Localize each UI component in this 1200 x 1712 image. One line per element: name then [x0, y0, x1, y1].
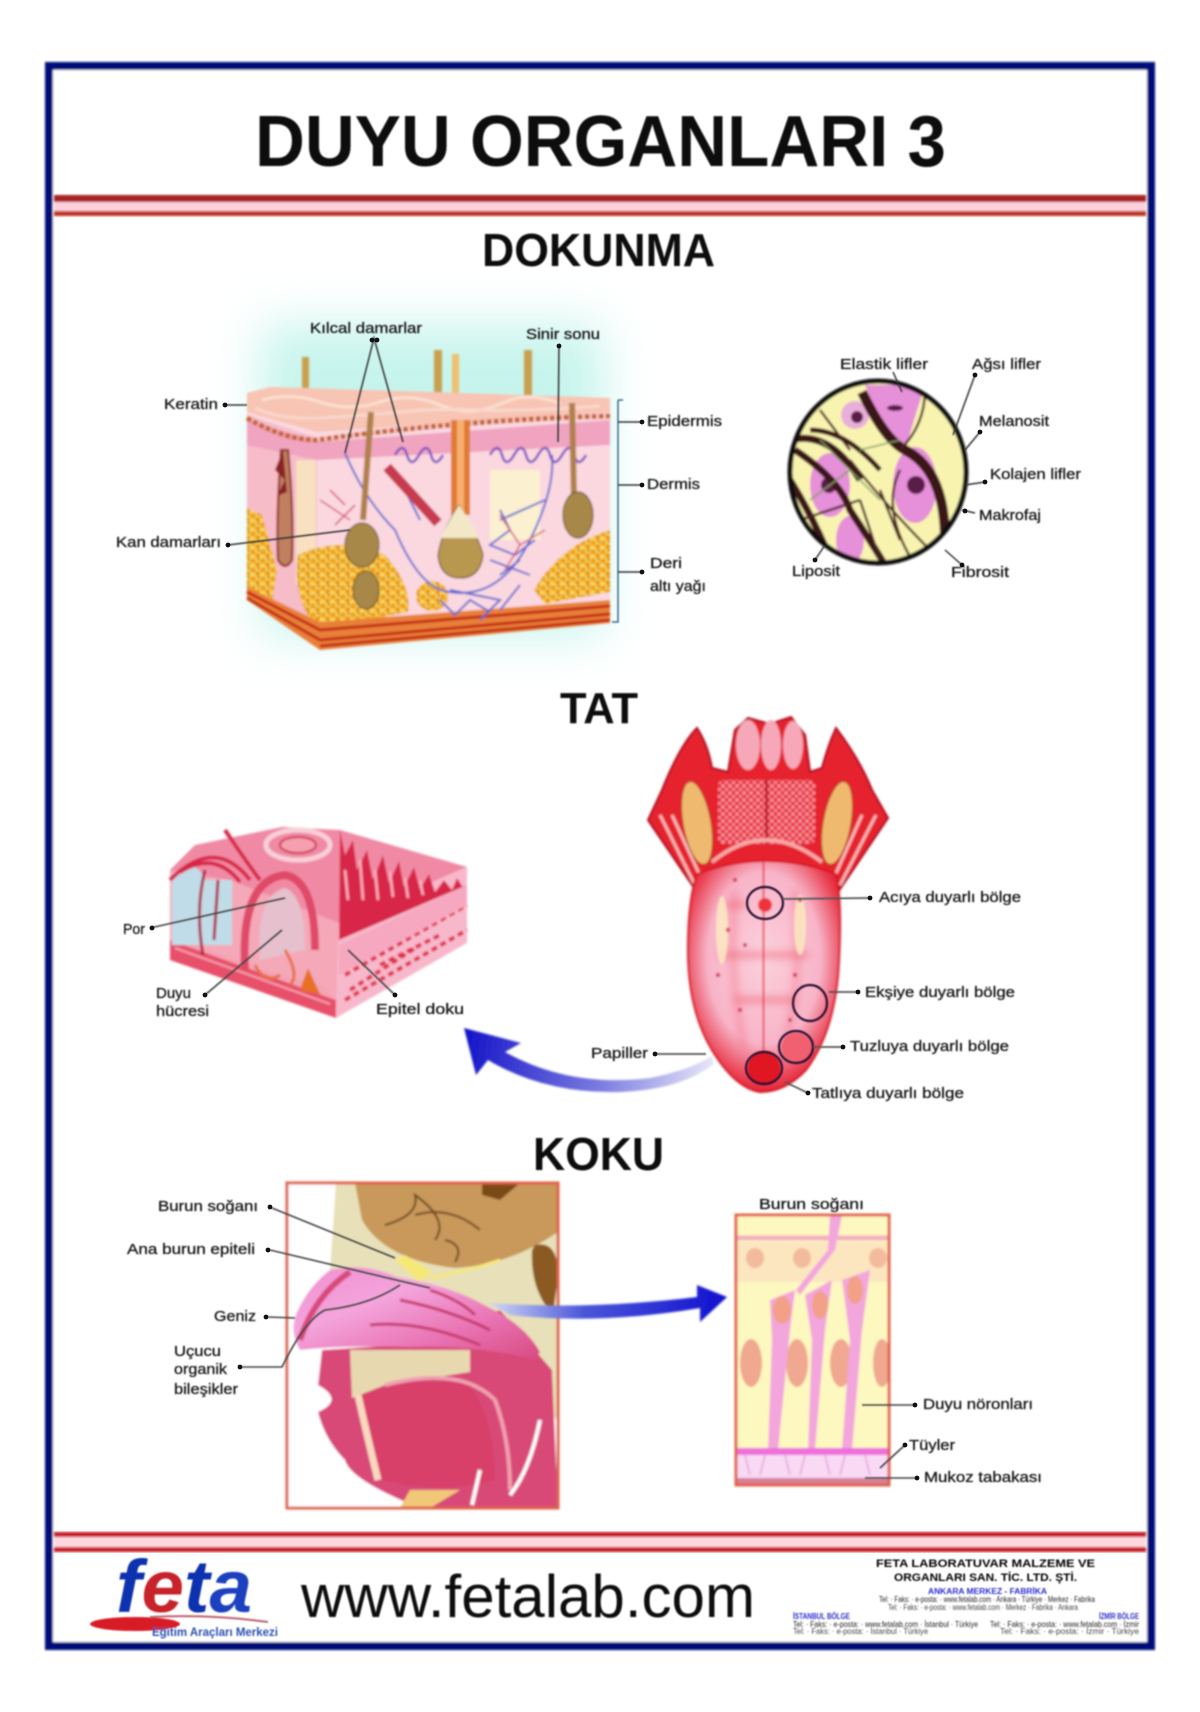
label: Kolajen lifler — [990, 466, 1081, 483]
label: Geniz — [214, 1308, 256, 1325]
right follicle — [563, 403, 593, 538]
epidermis band — [247, 420, 610, 460]
label: Keratin — [164, 396, 218, 413]
logo: feta: feta — [116, 1545, 252, 1628]
logo: feta: Eğitim Araçları Merkezi — [152, 1625, 278, 1639]
taste bud arch — [244, 875, 315, 970]
panel: skin cross-section — [223, 325, 644, 650]
skin top surface — [247, 387, 610, 432]
block leader lines — [150, 898, 395, 995]
label: Sinir sonu — [526, 326, 600, 343]
company contact block: Tel: · Faks: · e-posta: · www.fetalab.com · Ankara · Türkiye · Merkez · Fabrika — [879, 1595, 1095, 1604]
label: Uçucu — [174, 1343, 221, 1360]
blue vessels — [345, 453, 552, 620]
label: Tuzluya duyarlı bölge — [850, 1038, 1009, 1055]
company contact block: Tel: · Faks: · e-posta: · İstanbul · Türkiye — [793, 1627, 929, 1636]
label: Burun soğanı — [759, 1196, 864, 1213]
filiform papillae — [339, 830, 467, 940]
leader dots epithelium — [903, 1403, 919, 1480]
neurons — [768, 1215, 870, 1450]
label: Papiller — [591, 1045, 648, 1062]
label: Deri — [650, 555, 682, 572]
company contact block: FETA LABORATUVAR MALZEME VE — [876, 1558, 1095, 1570]
head labels — [127, 1198, 258, 1398]
label: Ekşiye duyarlı bölge — [865, 984, 1015, 1001]
pink cells — [810, 385, 937, 564]
leader lines skin — [225, 338, 642, 622]
company contact block: Tel: · Faks: · e-posta: · İzmir · Türkiye — [1000, 1627, 1140, 1636]
olfactory bulb — [395, 1255, 432, 1282]
lingual tonsil texture — [718, 780, 815, 844]
top face — [170, 827, 467, 923]
epithelium labels — [759, 1196, 1042, 1486]
heading: koku: KOKU — [533, 1128, 664, 1180]
pale mouth band — [350, 1350, 470, 1398]
panel: tongue — [648, 717, 888, 1095]
skin block base — [247, 387, 610, 650]
arrow: nose to epithelium — [488, 1285, 727, 1322]
salmon nuclei — [740, 1248, 891, 1387]
label: Fibrosit — [951, 564, 1010, 581]
mucus layer — [736, 1448, 889, 1455]
median groove — [763, 860, 764, 1075]
label: Epitel doku — [376, 1001, 464, 1018]
label: Dermis — [647, 476, 700, 493]
company contact block: Tel: · Faks: · e-posta: · www.fetalab.com · İzmir — [990, 1620, 1139, 1629]
heading: dokunma: DOKUNMA — [482, 224, 715, 276]
label: Elastik lifler — [840, 356, 928, 373]
leader dots circle — [813, 373, 987, 567]
header double rule — [54, 195, 1146, 216]
label: Duyu — [156, 985, 191, 1002]
tongue body — [688, 861, 840, 1092]
coiled gland — [345, 412, 379, 609]
label: Liposit — [792, 563, 841, 580]
label: Ana burun epiteli — [127, 1241, 255, 1258]
fat lobes — [247, 508, 610, 630]
tongue leader lines — [655, 898, 870, 1093]
panel: taste bud block — [150, 827, 467, 1018]
panel: microscopic dermis circle — [790, 372, 987, 570]
main hair follicle — [438, 420, 483, 578]
company contact block: ANKARA MERKEZ - FABRİKA — [928, 1587, 1047, 1596]
label: Melanosit — [979, 413, 1050, 430]
label: Acıya duyarlı bölge — [879, 889, 1021, 906]
tongue labels — [591, 889, 1021, 1102]
thick fibres — [862, 392, 945, 540]
arrow: tongue to papilla — [464, 1028, 714, 1092]
brain — [355, 1183, 558, 1268]
company contact block — [793, 1558, 1140, 1636]
panel: head section — [238, 1183, 558, 1508]
label: Makrofaj — [979, 507, 1041, 524]
label: Tatlıya duyarlı bölge — [812, 1085, 964, 1102]
left face — [247, 415, 317, 630]
dermis cream patch — [490, 470, 540, 540]
label: Kılcal damarlar — [310, 320, 422, 337]
company contact block: Tel: · Faks: · e-posta: · www.fetalab.com · İstanbul · Türkiye — [793, 1620, 978, 1629]
company contact block: İZMİR BÖLGE — [1099, 1612, 1139, 1621]
label: hücresi — [156, 1003, 209, 1020]
erector muscle — [387, 467, 438, 523]
heading: tat: TAT — [560, 684, 638, 733]
hair shafts — [302, 350, 532, 420]
taste zone circles — [746, 887, 827, 1084]
side follicle left — [277, 450, 292, 566]
label: Por — [123, 921, 145, 938]
blue pale area — [172, 866, 232, 945]
leader dots skin — [223, 338, 644, 574]
cyan glow behind skin — [262, 325, 602, 635]
tonsil left — [676, 779, 718, 867]
skin labels — [116, 320, 722, 595]
company contact block: İSTANBUL BÖLGE — [793, 1612, 851, 1621]
label: Ağsı lifler — [972, 356, 1041, 373]
label: Tüyler — [909, 1437, 955, 1454]
footer double rule — [54, 1532, 1146, 1552]
leader dots block — [150, 926, 397, 997]
muscle base layer — [247, 587, 610, 650]
tongue root — [648, 717, 888, 892]
upper tissue layer — [736, 1236, 889, 1240]
leader lines circle — [815, 372, 985, 565]
nasal cavity — [293, 1267, 540, 1360]
label: organik — [174, 1361, 228, 1378]
head leader lines — [242, 1208, 430, 1367]
label: Epidermis — [647, 413, 722, 430]
website url: www.fetalab.com — [300, 1563, 755, 1630]
label: Kan damarları — [116, 534, 221, 551]
tonsil right — [816, 779, 858, 867]
circle labels — [792, 356, 1081, 581]
company contact block: ORGANLARI SAN. TİC. LTD. ŞTİ. — [894, 1571, 1077, 1584]
label: Duyu nöronları — [923, 1396, 1033, 1413]
label: bileşikler — [174, 1381, 238, 1398]
right face — [336, 867, 467, 1018]
company contact block: Tel: · Faks: · e-posta: · www.fetalab.com · Merkez · Fabrika · Ankara — [888, 1603, 1078, 1612]
leader dots head — [238, 1205, 272, 1369]
front left face — [170, 870, 339, 1018]
logo: feta — [90, 1545, 278, 1639]
epiglottis lumps — [736, 720, 803, 770]
tongue — [360, 1382, 495, 1488]
label: altı yağı — [650, 578, 706, 595]
label: Burun soğanı — [158, 1198, 258, 1215]
mouth and throat — [318, 1310, 558, 1508]
beige tissue — [330, 1183, 558, 1420]
block labels — [123, 921, 464, 1020]
label: Mukoz tabakası — [924, 1469, 1042, 1486]
red dotted connective tissue — [345, 905, 467, 1000]
panel: olfactory epithelium — [736, 1215, 919, 1485]
epithelium leader lines — [862, 1405, 917, 1478]
title: DUYU ORGANLARI 3 — [255, 102, 946, 182]
thin fibres — [800, 390, 930, 565]
rings — [266, 830, 330, 860]
leader dots tongue — [653, 896, 872, 1095]
